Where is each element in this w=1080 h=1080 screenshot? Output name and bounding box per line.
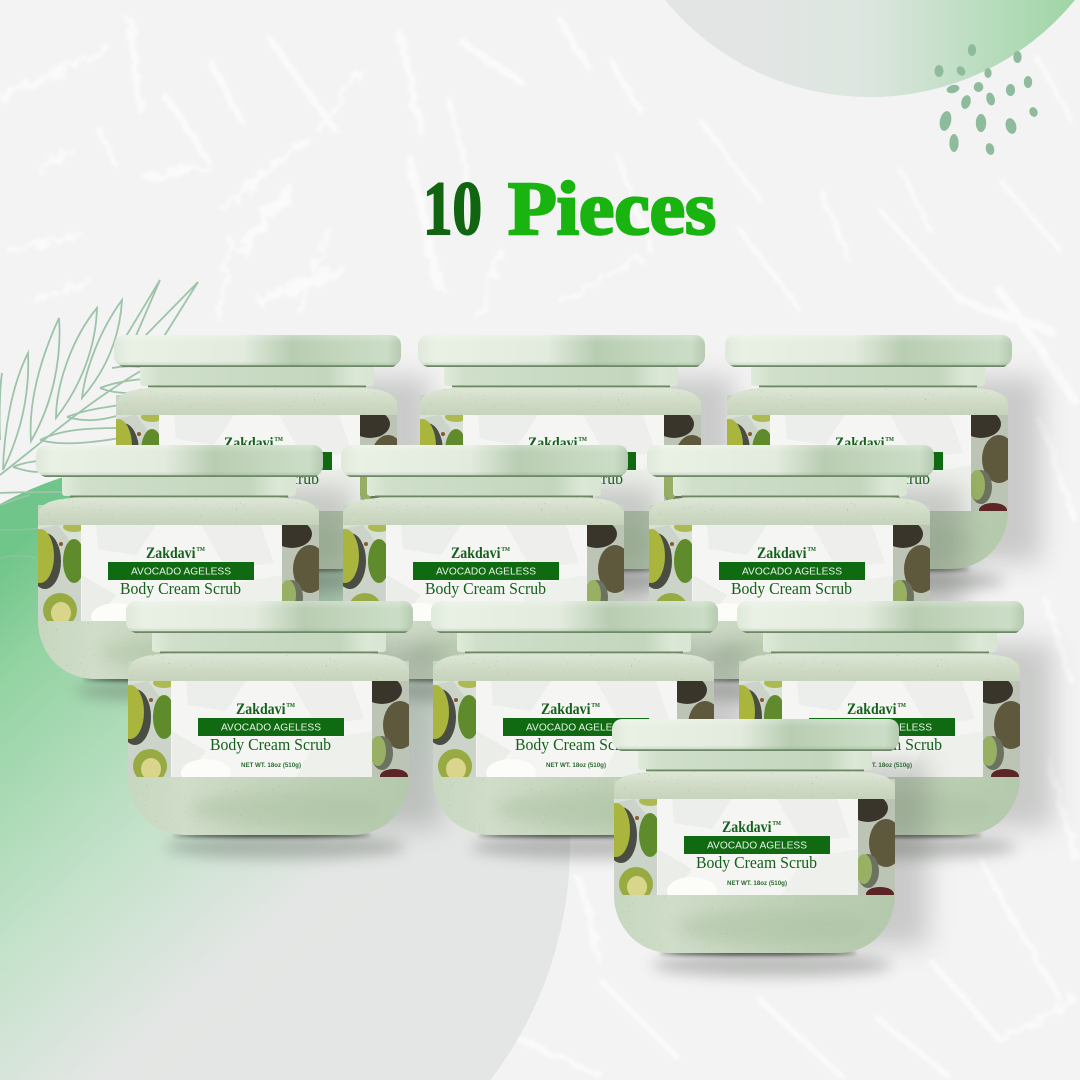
jar row 3 left: TM: [286, 703, 295, 709]
large green to gray circle, bottom left: [0, 458, 570, 1080]
jar row 2 left: [26, 445, 352, 703]
jar row 2 right: Zakdavi: [757, 545, 812, 562]
jar row 1 left: NET WT. 18oz (510g): [229, 496, 289, 503]
jar front: NET WT. 18oz (510g): [727, 880, 787, 887]
jar row 3 right: Zakdavi: [847, 701, 902, 718]
jar row 3 center: [421, 601, 747, 859]
jar row 1 left: Body Cream Scrub: [198, 469, 319, 488]
jar row 1 right: NET WT. 18oz (510g): [840, 496, 900, 503]
jar front: TM: [772, 821, 781, 827]
jar row 2 left: AVOCADO AGELESS: [131, 566, 231, 578]
jar row 2 left: TM: [196, 547, 205, 553]
jar row 1 left: Zakdavi: [224, 435, 279, 452]
jar row 1 center: Body Cream Scrub: [502, 469, 623, 488]
jar row 2 left: NET WT. 18oz (510g): [151, 606, 211, 613]
jar row 2 right: [637, 445, 963, 703]
jar row 2 right: Body Cream Scrub: [731, 579, 852, 598]
jar row 2 left: Body Cream Scrub: [120, 579, 241, 598]
jar row 3 left: [116, 601, 442, 859]
jar row 1 left: AVOCADO AGELESS: [209, 456, 309, 468]
jar row 1 center: AVOCADO AGELESS: [513, 456, 613, 468]
jar front: [602, 719, 928, 977]
jar row 3 right: [727, 601, 1053, 859]
jar row 2 center: Zakdavi: [451, 545, 506, 562]
jar row 2 center: [331, 445, 657, 703]
title: 10 Pieces: Pieces: [508, 167, 716, 251]
jar row 1 right: [715, 335, 1041, 593]
jar front: Body Cream Scrub: [696, 853, 817, 872]
jar row 1 right: TM: [885, 437, 894, 443]
jar row 3 center: TM: [591, 703, 600, 709]
jar row 2 center: NET WT. 18oz (510g): [456, 606, 516, 613]
jar row 1 left: TM: [274, 437, 283, 443]
jar row 1 center: [408, 335, 734, 593]
jar row 1 center: Zakdavi: [528, 435, 583, 452]
jar row 3 center: NET WT. 18oz (510g): [546, 762, 606, 769]
jar row 2 right: TM: [807, 547, 816, 553]
jar row 1 center: TM: [578, 437, 587, 443]
jar row 3 right: AVOCADO AGELESS: [832, 722, 932, 734]
icon: palm leaf outline: [0, 280, 198, 558]
jar row 1 right: Zakdavi: [835, 435, 890, 452]
jar row 3 left: AVOCADO AGELESS: [221, 722, 321, 734]
jar row 3 center: AVOCADO AGELESS: [526, 722, 626, 734]
title: 10 Pieces: 10: [423, 167, 482, 251]
jar row 1 right: AVOCADO AGELESS: [820, 456, 920, 468]
green to gray circle, top right: [665, 0, 1075, 97]
jar row 3 center: Zakdavi: [541, 701, 596, 718]
jar row 2 center: Body Cream Scrub: [425, 579, 546, 598]
jar row 1 right: Body Cream Scrub: [809, 469, 930, 488]
jar row 3 left: Zakdavi: [236, 701, 291, 718]
jar row 2 center: AVOCADO AGELESS: [436, 566, 536, 578]
icon: scattered seed dots: [934, 44, 1039, 156]
jar front: AVOCADO AGELESS: [707, 840, 807, 852]
jar row 3 center: Body Cream Scrub: [515, 735, 636, 754]
jar row 1 left: [104, 335, 430, 593]
jar row 2 left: Zakdavi: [146, 545, 201, 562]
jar row 1 center: NET WT. 18oz (510g): [533, 496, 593, 503]
jar row 3 left: Body Cream Scrub: [210, 735, 331, 754]
jar row 2 right: NET WT. 18oz (510g): [762, 606, 822, 613]
jar row 3 left: NET WT. 18oz (510g): [241, 762, 301, 769]
jar row 2 right: AVOCADO AGELESS: [742, 566, 842, 578]
jar row 2 center: TM: [501, 547, 510, 553]
jar row 3 right: Body Cream Scrub: [821, 735, 942, 754]
title: 10 Pieces: [423, 167, 716, 251]
jar row 3 right: TM: [897, 703, 906, 709]
jar row 3 right: NET WT. 18oz (510g): [852, 762, 912, 769]
jar front: Zakdavi: [722, 819, 777, 836]
